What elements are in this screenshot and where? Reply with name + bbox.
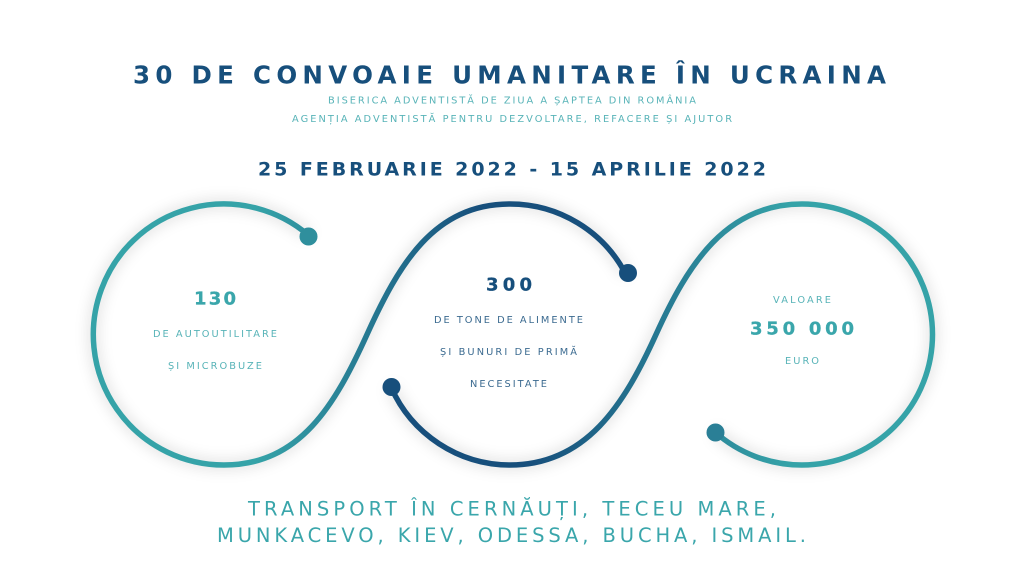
- vehicles line 2: ȘI MICROBUZE: [168, 361, 262, 372]
- panel: tonnage: [434, 274, 583, 390]
- value number: 350 000: [750, 318, 854, 340]
- value label: VALOARE: [773, 295, 831, 306]
- date range: 25 FEBRUARIE 2022 - 15 APRILIE 2022: [258, 158, 766, 180]
- footer destinations: [217, 496, 806, 547]
- end dot middle top: [619, 264, 637, 282]
- end dot middle bottom: [382, 378, 400, 396]
- vehicles line 1: DE AUTOUTILITARE: [153, 329, 277, 340]
- destinations line 1: TRANSPORT ÎN CERNĂUȚI, TECEU MARE,: [247, 496, 776, 520]
- curve: first loop and middle top: [93, 204, 637, 465]
- curve line: [391, 204, 932, 465]
- curve line: [93, 204, 626, 465]
- number 130: 130: [194, 288, 236, 310]
- curve: middle bottom and last loop: [382, 204, 932, 465]
- tonnage line 3: NECESITATE: [470, 379, 547, 390]
- subtitle line 2: AGENȚIA ADVENTISTĂ PENTRU DEZVOLTARE, REFACERE ȘI AJUTOR: [292, 112, 732, 125]
- subtitle line 1: BISERICA ADVENTISTĂ DE ZIUA A ȘAPTEA DIN ROMÂNIA: [328, 94, 696, 106]
- end dot right loop: [706, 424, 724, 442]
- panel: vehicles: [153, 288, 277, 372]
- title: 30 DE CONVOAIE UMANITARE ÎN UCRAINA: [133, 60, 886, 90]
- destinations line 2: MUNKACEVO, KIEV, ODESSA, BUCHA, ISMAIL.: [217, 524, 806, 547]
- soft curve shadows: [93, 204, 932, 465]
- panel: value: [750, 295, 854, 367]
- end dot left loop: [300, 228, 318, 246]
- currency label: EURO: [785, 356, 819, 367]
- tonnage line 1: DE TONE DE ALIMENTE: [434, 315, 583, 326]
- header: [133, 60, 886, 180]
- tonnage line 2: ȘI BUNURI DE PRIMĂ: [440, 345, 577, 358]
- number 300: 300: [486, 274, 532, 296]
